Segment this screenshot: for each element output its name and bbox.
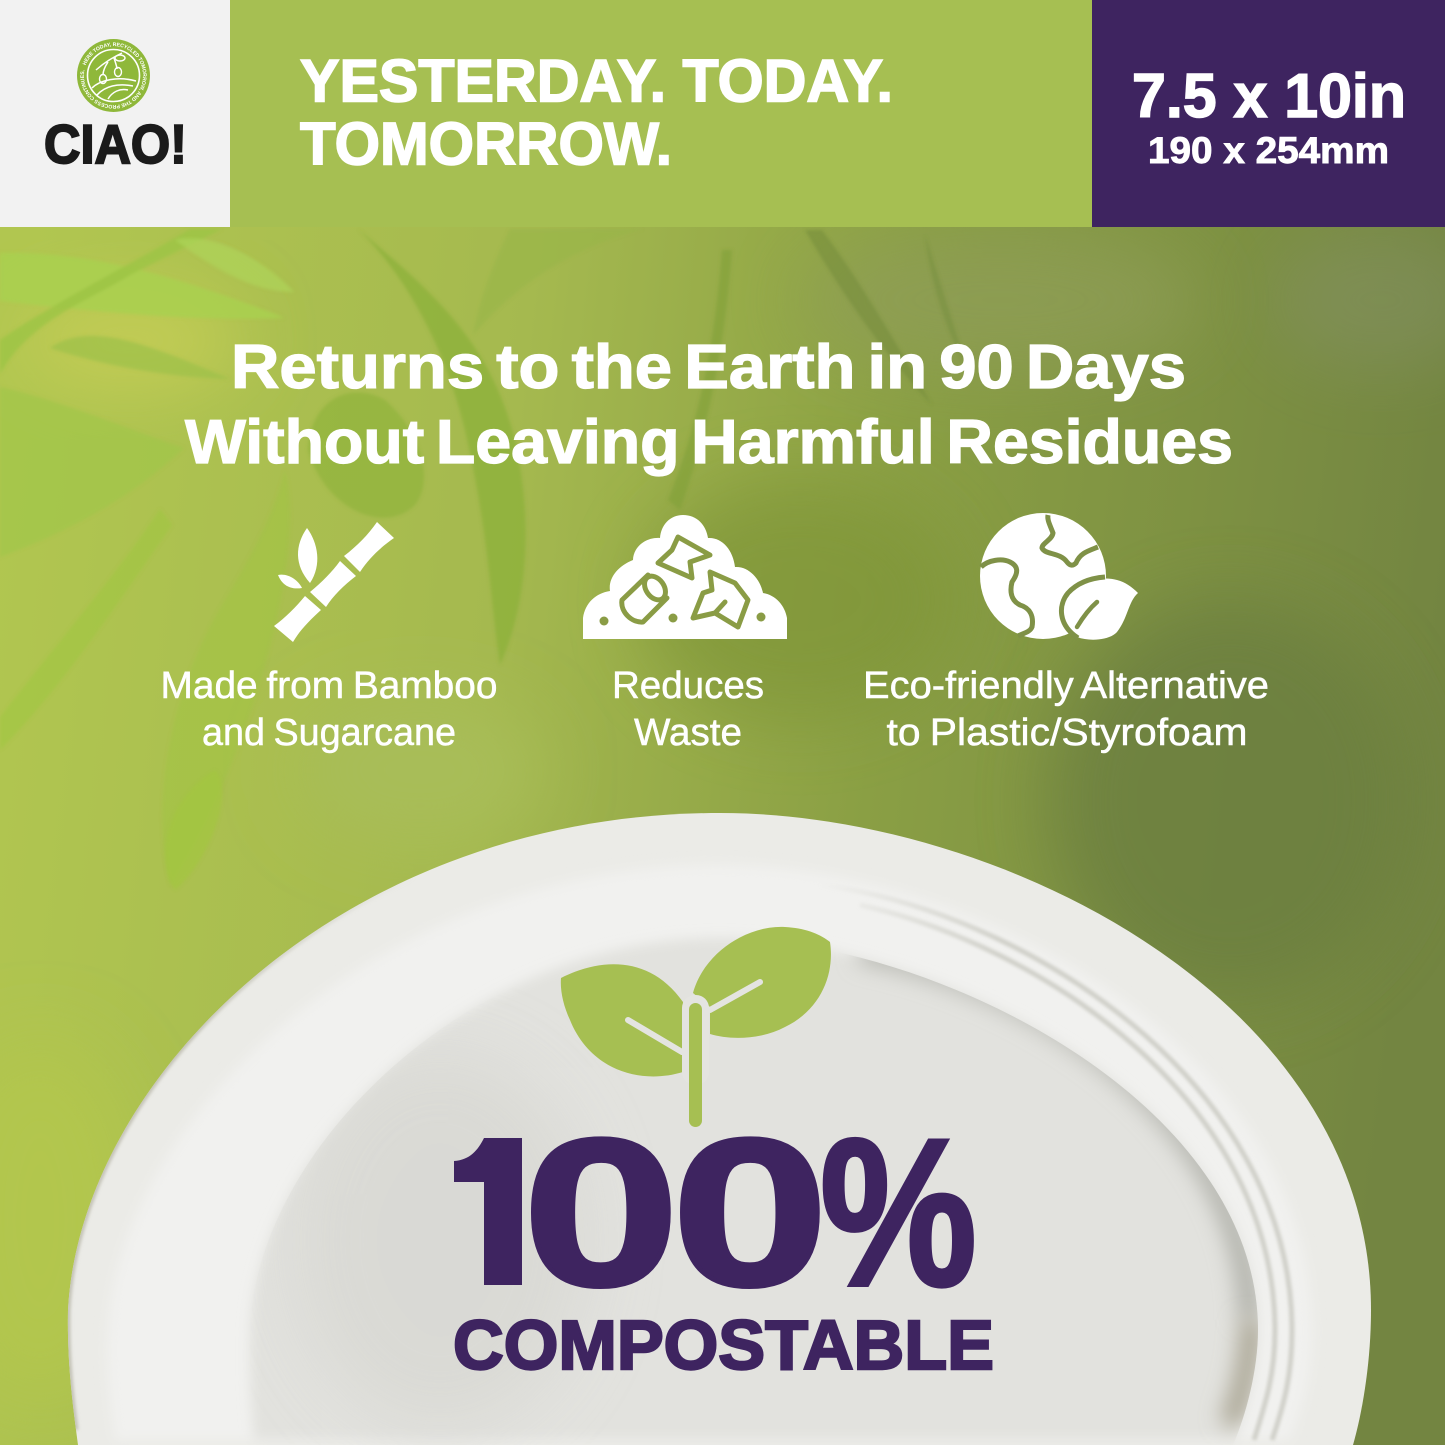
caption: waste: Reduces [612,665,764,707]
size text: 7.5 x 10in [1132,62,1406,131]
well shading [290,950,1252,1430]
blurred leaf bottom [165,770,222,890]
headline: Without Leaving Harmful Residues [185,408,1233,477]
headline [185,333,1233,477]
COMPOSTABLE: COMPOSTABLE [453,1306,994,1384]
100% [454,1136,974,1289]
leaves [0,229,968,886]
caption: eco-friendly [863,665,1269,754]
rim to well band [107,865,1312,1440]
icon: sprout [561,927,831,1127]
header: size panel [1092,0,1445,227]
caption: waste [612,665,764,754]
caption: bamboo: Made from Bamboo [160,665,497,707]
header: slogan panel [230,0,1092,227]
icon: earth and leaf [980,513,1138,640]
slogan [300,48,893,178]
100%: % [820,1095,977,1330]
well [250,938,1258,1440]
100%: 00 [523,1095,829,1330]
caption: bamboo [160,665,497,754]
slogan: TOMORROW. [300,110,672,178]
headline: Returns to the Earth in 90 Days [231,333,1186,402]
icon: bamboo [274,522,394,642]
groove lines [820,885,1292,1440]
100%: 1 [417,1095,574,1330]
size text [1132,62,1406,171]
logo wordmark: CIAO! [44,113,187,175]
caption: waste: Waste [634,712,742,754]
rim edge [68,901,366,1432]
icon captions [160,665,1269,754]
icon: waste pile [583,515,787,639]
caption: eco-friendly: to Plastic/Styrofoam [886,712,1248,754]
header: logo panel [0,0,230,227]
size text: 190 x 254mm [1148,130,1389,171]
logo badge: HERE TODAY, RECYCLED TOMORROW, AND THE PROCESS CONTINUES. [80,42,147,109]
plate [60,810,1380,1445]
slogan: YESTERDAY. TODAY. [300,48,893,114]
caption: eco-friendly: Eco-friendly Alternative [863,665,1269,707]
caption: bamboo: and Sugarcane [202,712,456,754]
